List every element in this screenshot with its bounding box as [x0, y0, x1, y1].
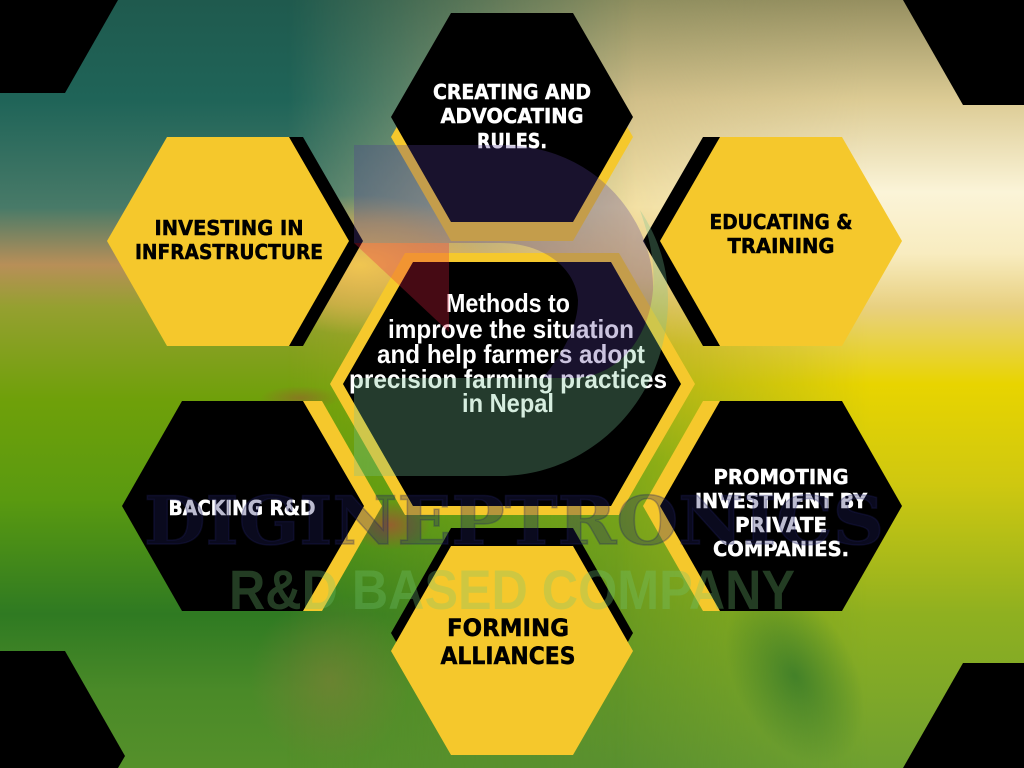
corner hexagon: top right [903, 0, 1024, 105]
central title: and help farmers adopt [377, 339, 645, 369]
hexagon: educating and training [643, 137, 902, 346]
corner hexagon: top left [0, 0, 118, 93]
hexagon: forming alliances [391, 528, 633, 755]
central title: improve the situation [388, 314, 634, 344]
label: forming alliances: FORMING [447, 614, 569, 642]
central hexagon [330, 253, 695, 515]
label: creating and advocating rules: RULES. [477, 129, 547, 153]
central title: in Nepal [462, 388, 554, 418]
label: promoting investment: COMPANIES. [713, 537, 849, 561]
hexagon: promoting investment by private companies [643, 401, 902, 611]
label: investing in infrastructure: INFRASTRUCTURE [135, 240, 323, 264]
watermark: tagline: R&D BASED COMPANY [229, 558, 795, 621]
label: forming alliances: ALLIANCES [440, 642, 576, 670]
label: promoting investment: PRIVATE [735, 513, 827, 537]
label: creating and advocating rules: CREATING AND [433, 80, 591, 104]
label: promoting investment: INVESTMENT BY [695, 489, 867, 513]
hexagon: creating and advocating rules [391, 13, 633, 241]
label: educating and training: TRAINING [728, 234, 834, 258]
watermark: company name: DIGINEPTRONICS [144, 482, 884, 560]
label: creating and advocating rules: ADVOCATING [440, 104, 584, 128]
watermark logo: Digineptronics D [354, 145, 668, 476]
label: backing R&D: BACKING R&D [168, 496, 316, 520]
central title: precision farming practices [349, 364, 667, 394]
hexagon: backing R&D [122, 401, 382, 611]
corner hexagon: bottom left [0, 651, 125, 768]
hexagon: investing in infrastructure [107, 137, 363, 346]
label: educating and training: EDUCATING & [710, 210, 852, 234]
label: promoting investment: PROMOTING [714, 465, 848, 489]
corner hexagon: bottom right [903, 663, 1024, 768]
central title: Methods to [446, 288, 570, 318]
label: investing in infrastructure: INVESTING IN [154, 216, 304, 240]
